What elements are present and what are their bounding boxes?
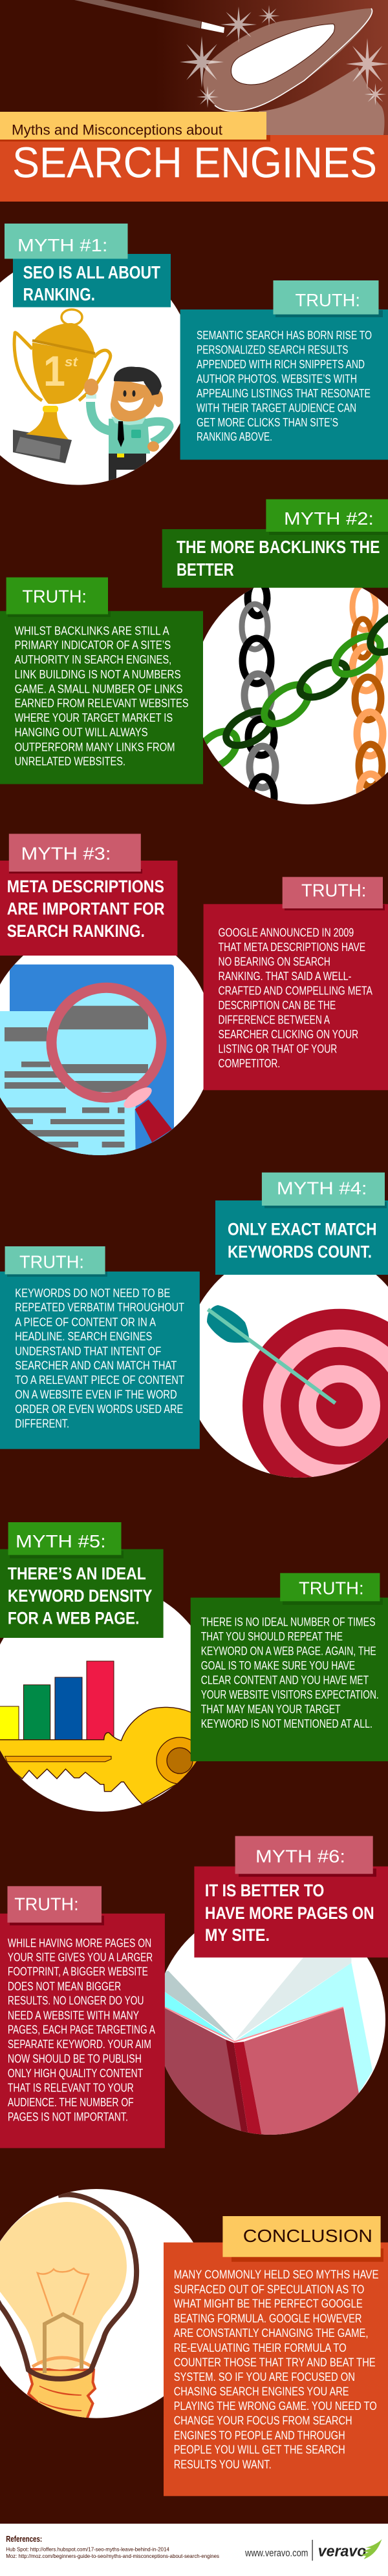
panel: truth 2 [0,578,203,784]
truth 4 text: HEADLINE. SEARCH ENGINES [15,1330,152,1343]
panel: myth 2 [162,499,388,815]
myth 2 tag: MYTH #2: [284,508,374,529]
truth 3 text: DIFFERENCE BETWEEN A [219,1013,330,1026]
illustration: trophy and man in circle: 1 [43,347,65,395]
truth 6 text: FOOTPRINT, A BIGGER WEBSITE [8,1965,148,1978]
logo: veravo: veravo [318,2543,366,2560]
panel: conclusion [164,2216,388,2496]
panel: truth 3 [204,877,388,1090]
myth 4 tag: MYTH #4: [277,1178,367,1198]
truth 3 text: GOOGLE ANNOUNCED IN 2009 [219,926,354,939]
conclusion text [174,2268,379,2471]
myth 1 statement box: RANKING. [23,284,95,304]
truth 6 tag: TRUTH: [14,1894,79,1914]
myth 4 tag [262,1173,385,1206]
references: Moz: http://moz.com/beginners-guide-to-seo/myths-and-misconceptions-about-search-engines [6,2553,219,2559]
truth 6 text: PAGES IS NOT IMPORTANT. [8,2110,128,2123]
conclusion text: CHANGE YOUR FOCUS FROM SEARCH [174,2414,352,2427]
truth 6 text: WHILE HAVING MORE PAGES ON [8,1936,151,1949]
illustration: chains in circle [203,588,388,804]
panel: truth 1 [180,280,388,460]
myth 1 tag [5,224,128,258]
truth 2 text [15,624,189,768]
myth 3 statement box [0,861,177,956]
truth 1 text: GET MORE CLICKS THAN SITE’S [197,416,338,429]
truth 6 text: THAT IS RELEVANT TO YOUR [8,2082,134,2095]
conclusion text: RE-EVALUATING THEIR FORMULA TO [174,2341,347,2354]
logo: veravo: www.veravo.com [244,2548,308,2559]
title banner [0,112,388,202]
truth 4 text: ON A WEBSITE EVEN IF THE WORD [15,1388,177,1401]
truth 2 text: UNRELATED WEBSITES. [15,755,125,768]
footer [0,2524,388,2576]
truth 3 text: RANKING. THAT SAID A WELL- [219,970,351,983]
truth 6 tag [8,1886,102,1923]
truth 2 text: HANGING OUT WILL ALWAYS [15,726,148,739]
truth 2 text: EARNED FROM RELEVANT WEBSITES [15,696,189,709]
truth 2 text: PRIMARY INDICATOR OF A SITE’S [15,639,171,652]
myth 6 statement box: MY SITE. [205,1925,270,1945]
truth 3 tag [283,877,383,908]
conclusion tag [222,2216,381,2257]
myth 2 statement box [162,529,388,588]
truth 2 text: LINK BUILDING IS NOT A NUMBERS [15,668,181,681]
myth 6 tag [235,1836,373,1874]
myth 3 statement box: SEARCH RANKING. [7,921,145,941]
panel: myth 4 [199,1172,388,1478]
truth 1 text: RANKING ABOVE. [197,430,272,443]
header illustration: magic wand and sparkles [0,0,388,135]
conclusion text: CHASING SEARCH ENGINES YOU ARE [174,2385,349,2398]
illustration: bar chart and key in circle [0,1601,197,1812]
truth 6 text: RESULTS. NO LONGER DO YOU [8,1995,144,2007]
myth 6 tag: MYTH #6: [255,1846,345,1866]
myth 4 statement box [215,1200,388,1275]
truth 3 tag: TRUTH: [301,880,366,900]
truth 4 text: KEYWORDS DO NOT NEED TO BE [15,1286,170,1299]
truth 2 tag [6,578,108,614]
illustration: light bulb in circle [0,2189,211,2420]
conclusion text: ENGINES TO PEOPLE AND THROUGH [174,2429,345,2442]
references: Hub Spot: http://offers.hubspot.com/17-seo-myths-leave-behind-in-2014 [6,2546,169,2552]
panel: myth 6 [155,1836,388,2145]
truth 4 text: UNDERSTAND THAT INTENT OF [15,1345,161,1357]
truth 2 text: OUTPERFORM MANY LINKS FROM [15,740,175,753]
truth 2 text: WHILST BACKLINKS ARE STILL A [15,624,169,637]
truth 6 text: ONLY HIGH QUALITY CONTENT [8,2067,143,2080]
myth 2 tag [266,499,388,532]
truth 4 text: ORDER OR EVEN WORDS USED ARE [15,1403,183,1416]
truth 2 text: GAME. A SMALL NUMBER OF LINKS [15,682,183,695]
truth 4 text: SEARCHER AND CAN MATCH THAT [15,1359,177,1372]
myth 6 statement box: IT IS BETTER TO [205,1881,324,1900]
illustration: target and arrow in circle [199,1275,388,1478]
truth 3 text [219,926,372,1070]
truth 4 tag: TRUTH: [19,1252,84,1272]
title banner: Myths and Misconceptions about [12,121,223,138]
truth 4 text: A PIECE OF CONTENT OR IN A [15,1315,156,1328]
truth 5 text: THAT YOU SHOULD REPEAT THE [201,1630,343,1643]
truth 6 text: NEED A WEBSITE WITH MANY [8,2009,139,2022]
truth 5 tag [280,1573,380,1601]
myth 5 statement box: FOR A WEB PAGE. [8,1608,140,1628]
myth 5 statement box [0,1549,164,1638]
panel: myth 5 [0,1522,216,1812]
logo: veravo [244,2539,382,2560]
truth 1 tag [273,280,379,315]
conclusion tag: CONCLUSION [243,2226,372,2246]
myth 5 tag: MYTH #5: [16,1531,106,1551]
myth 6 statement box [194,1867,388,1958]
references [6,2534,219,2559]
illustration: trophy and man in circle: st [65,355,78,370]
illustration: trophy and man in circle [0,273,180,485]
truth 2 text: WHERE YOUR TARGET MARKET IS [15,711,173,724]
myth 5 statement box: THERE’S AN IDEAL [8,1564,146,1583]
conclusion text: PEOPLE YOU WILL GET THE SEARCH [174,2444,345,2456]
truth 2 tag: TRUTH: [22,587,87,607]
truth 3 text: NO BEARING ON SEARCH [219,956,330,969]
truth 4 text: DIFFERENT. [15,1418,69,1430]
myth 2 statement box: BETTER [177,560,234,580]
truth 3 text: DESCRIPTION CAN BE THE [219,999,336,1012]
truth 2 text: AUTHORITY IN SEARCH ENGINES, [15,653,171,666]
truth 6 text: PAGES, EACH PAGE TARGETING A [8,2024,155,2037]
panel: myth 3 [0,833,214,1160]
truth 6 text: NOW SHOULD BE TO PUBLISH [8,2053,142,2066]
myth 3 statement box: ARE IMPORTANT FOR [7,899,165,919]
truth 5 tag: TRUTH: [299,1578,364,1598]
truth 4 text: REPEATED VERBATIM THROUGHOUT [15,1301,184,1314]
conclusion text: RESULTS YOU WANT. [174,2458,272,2471]
truth 1 tag: TRUTH: [295,290,360,310]
truth 5 text [201,1616,379,1730]
truth 6 text: YOUR SITE GIVES YOU A LARGER [8,1951,153,1964]
myth 1 statement box [13,254,171,308]
panel: truth 6 [0,1886,165,2148]
myth 1 tag: MYTH #1: [17,235,107,255]
truth 1 text [197,329,372,443]
truth 6 text: DOES NOT MEAN BIGGER [8,1980,121,1993]
myth 1 statement box: SEO IS ALL ABOUT [23,262,160,282]
panel: myth 1 [0,224,194,485]
truth 3 text: COMPETITOR. [219,1057,280,1070]
truth 4 tag [5,1246,105,1274]
truth 6 text: SEPARATE KEYWORD. YOUR AIM [8,2038,151,2051]
truth 4 text: TO A RELEVANT PIECE OF CONTENT [15,1374,184,1387]
myth 3 tag [9,833,141,872]
panel: truth 5 [191,1573,388,1761]
myth 3 statement box: META DESCRIPTIONS [7,877,164,896]
panel: truth 4 [0,1246,200,1449]
myth 5 statement box: KEYWORD DENSITY [8,1586,152,1606]
illustration: magnifying glass over document in circle [0,956,204,1155]
conclusion text: SYSTEM. SO IF YOU ARE FOCUSED ON [174,2371,355,2383]
truth 4 text [15,1286,184,1430]
truth 6 text [8,1936,155,2123]
myth 5 tag [8,1522,121,1555]
illustration: open book in circle [164,1933,385,2135]
truth 3 text: LISTING OR THAT OF YOUR [219,1042,337,1055]
truth 5 text: THAT MAY MEAN YOUR TARGET [201,1703,341,1716]
references: References: [6,2534,42,2544]
myth 3 tag: MYTH #3: [21,844,111,864]
truth 6 text: AUDIENCE. THE NUMBER OF [8,2096,134,2109]
